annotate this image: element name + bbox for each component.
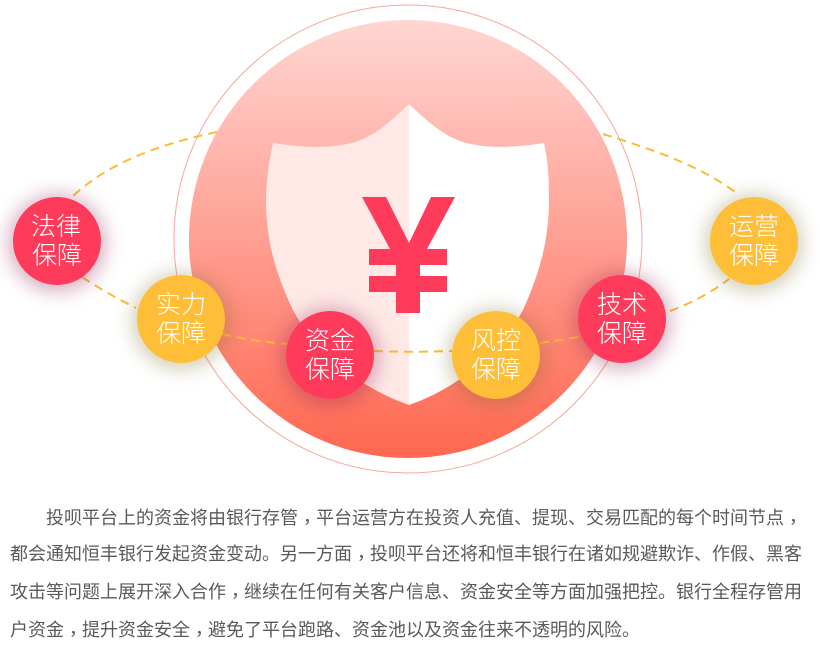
description paragraph: 投呗平台上的资金将由银行存管 ，平台运营方在投资人充值、提现、交易匹配的每个时间节点 ， (46, 507, 807, 528)
badge: 风控保障: 风控 (471, 327, 521, 355)
badge: 法律保障: 法律 (31, 213, 81, 241)
dashed connecting orbit (71, 132, 739, 352)
badge: 实力保障: 保障 (156, 320, 206, 348)
shield left half (266, 104, 409, 405)
badge: 风控保障 (452, 311, 540, 399)
badge: 资金保障 (286, 311, 374, 399)
icon: yen sign (362, 197, 455, 313)
main gradient circle (189, 20, 627, 458)
shield right half (409, 104, 549, 405)
shield (266, 104, 549, 405)
description paragraph: 攻击等问题上展开深入合作 ，继续在任何有关客户信息、资金安全等方面加强把控。银行全程存管用 (10, 581, 802, 602)
badge: 运营保障: 保障 (729, 242, 779, 270)
badge: 风控保障: 保障 (471, 356, 521, 384)
badge: 运营保障 (710, 197, 798, 285)
description paragraph (10, 507, 807, 640)
badge: 实力保障 (137, 275, 225, 363)
outer ring (174, 5, 642, 473)
badge: 法律保障: 保障 (32, 242, 82, 270)
badge: 技术保障: 保障 (597, 320, 647, 348)
badge: 资金保障: 保障 (305, 356, 355, 384)
badge: 实力保障: 实力 (156, 291, 206, 319)
description paragraph: 户资金 ，提升资金安全 ，避免了平台跑路、资金池以及资金往来不透明的风险。 (10, 619, 640, 640)
badge: 资金保障: 资金 (305, 327, 355, 355)
badge: 运营保障: 运营 (729, 213, 779, 241)
badge: 技术保障 (578, 275, 666, 363)
description paragraph: 都会通知恒丰银行发起资金变动。另一方面 ，投呗平台还将和恒丰银行在诸如规避欺诈、作假、黑客 (10, 543, 802, 564)
badge: 法律保障 (13, 197, 101, 285)
badge: 技术保障: 技术 (597, 291, 647, 319)
